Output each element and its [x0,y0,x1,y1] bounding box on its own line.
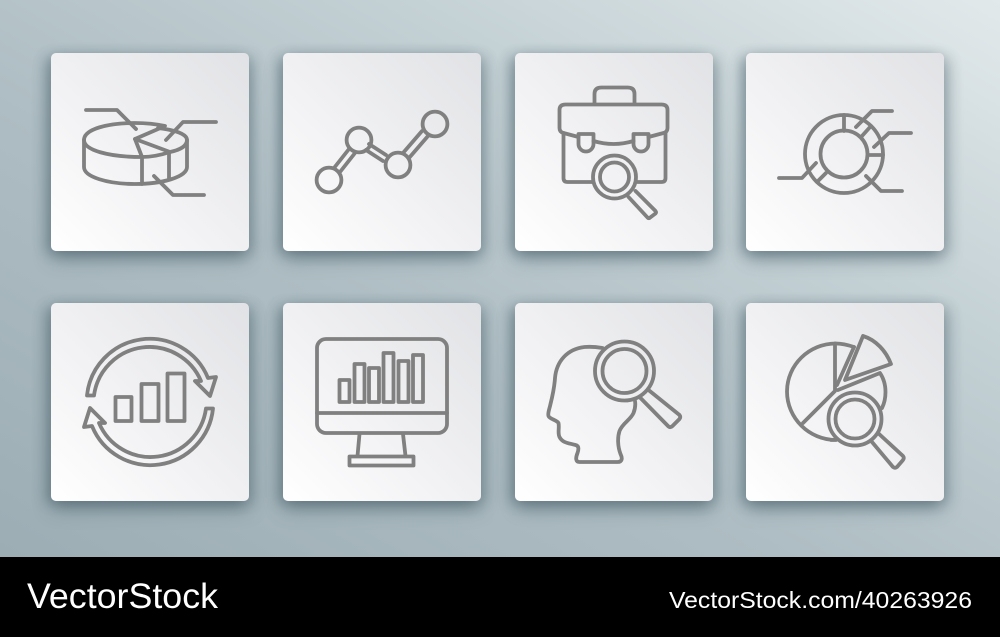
panel: monitor chart card [283,303,481,501]
icon: monitor showing bar chart [315,337,449,468]
panel: head search card [514,303,712,501]
icon: 3D pie chart with leader lines [82,108,218,197]
panel: 3D pie chart card [51,53,249,251]
image id text: VectorStock.com/40263926 [669,587,972,613]
panel: pie chart search card [746,303,944,501]
icon: bar chart with cycle arrows [82,336,218,468]
icon: line graph with four nodes [314,110,450,194]
icon: human head with magnifier [546,340,682,464]
icon: donut chart with leader lines [777,109,913,195]
logo text: VectorStock [27,577,219,616]
panel: briefcase search card [514,53,712,251]
panel: line graph card [283,53,481,251]
panel: refresh bar chart card [51,303,249,501]
footer bar [0,557,1000,637]
icon: pie chart with magnifier [785,334,906,470]
panel: donut chart card [746,53,944,251]
icon: briefcase with magnifier [558,86,670,220]
